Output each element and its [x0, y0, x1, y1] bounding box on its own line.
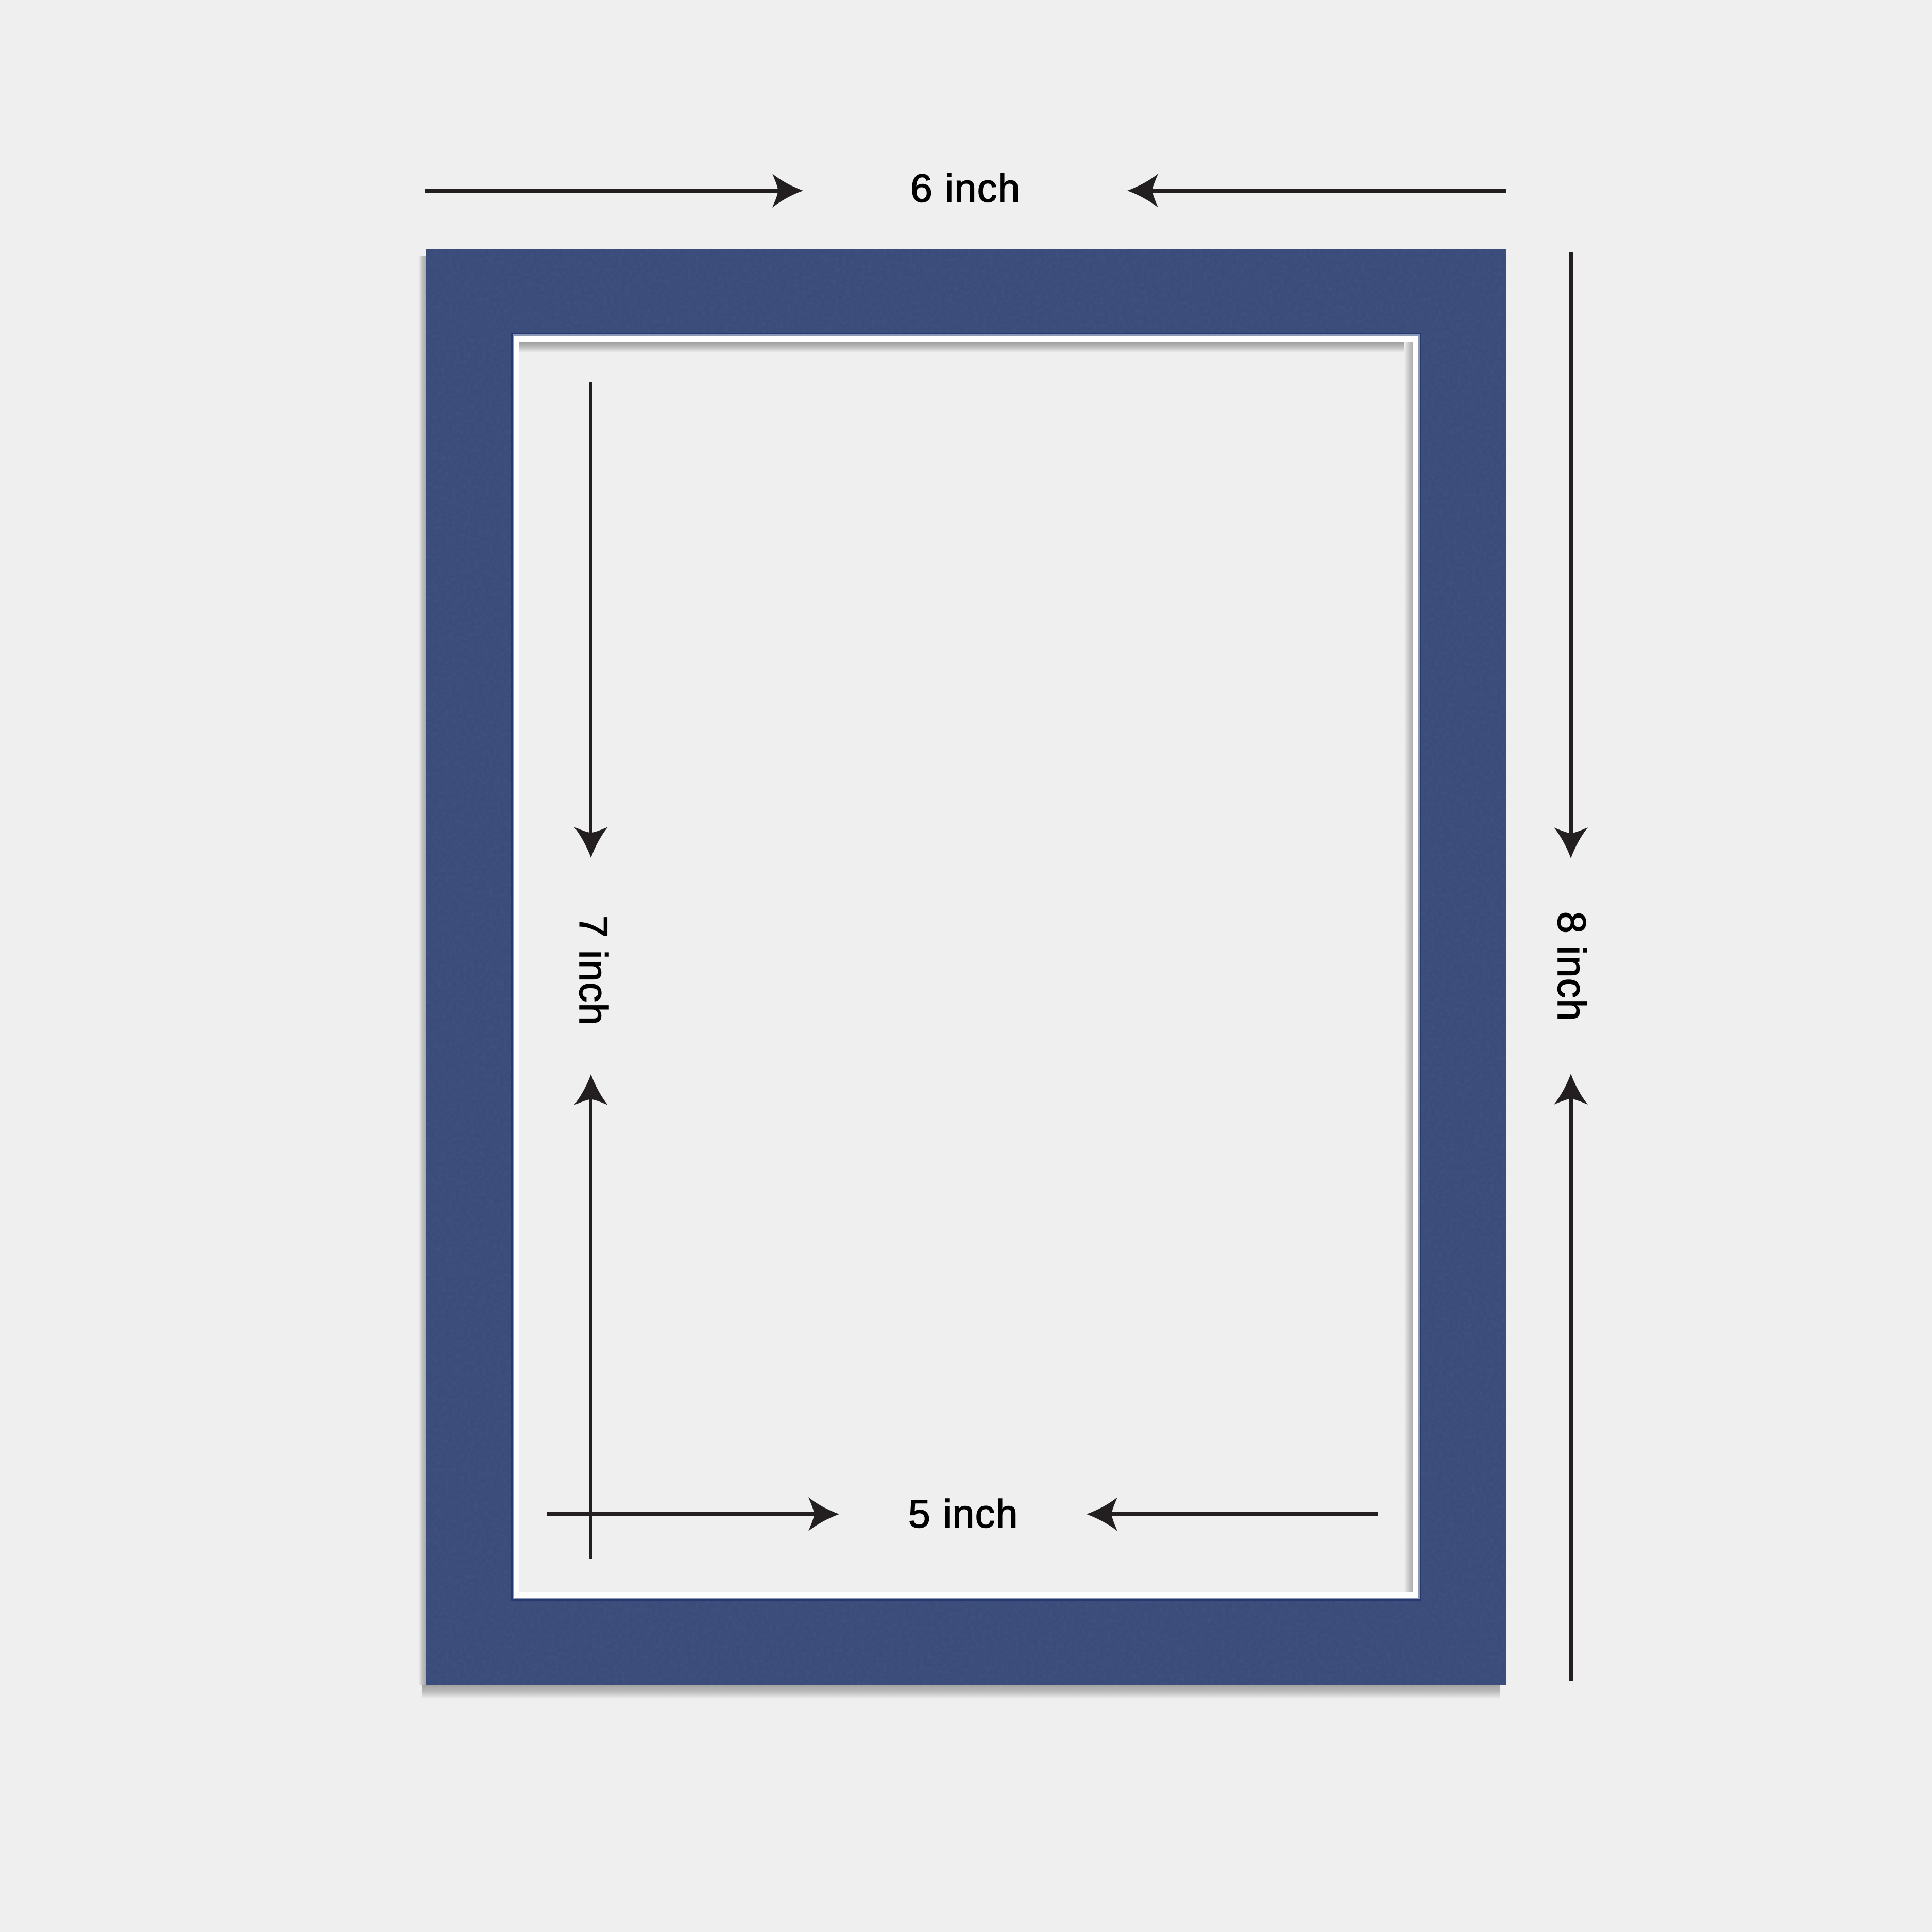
label: 5 inch: 5 inch	[908, 1492, 1019, 1536]
arrow: inner width, left side	[547, 1497, 839, 1531]
arrow: inner height, upper side	[574, 382, 608, 858]
arrow: outer height, upper side	[1554, 252, 1588, 858]
label: 6 inch: 6 inch	[910, 166, 1021, 211]
arrow: inner width, right side	[1087, 1497, 1378, 1531]
arrow: outer height, lower side	[1554, 1074, 1588, 1681]
arrow: inner height, lower side	[574, 1074, 608, 1559]
label: 7 inch: 7 inch	[571, 916, 615, 1026]
label: 8 inch: 8 inch	[1549, 911, 1594, 1022]
arrow: top width, right side	[1127, 174, 1506, 208]
arrow: top width, left side	[425, 174, 803, 208]
frame: blue mat board	[419, 249, 1506, 1699]
